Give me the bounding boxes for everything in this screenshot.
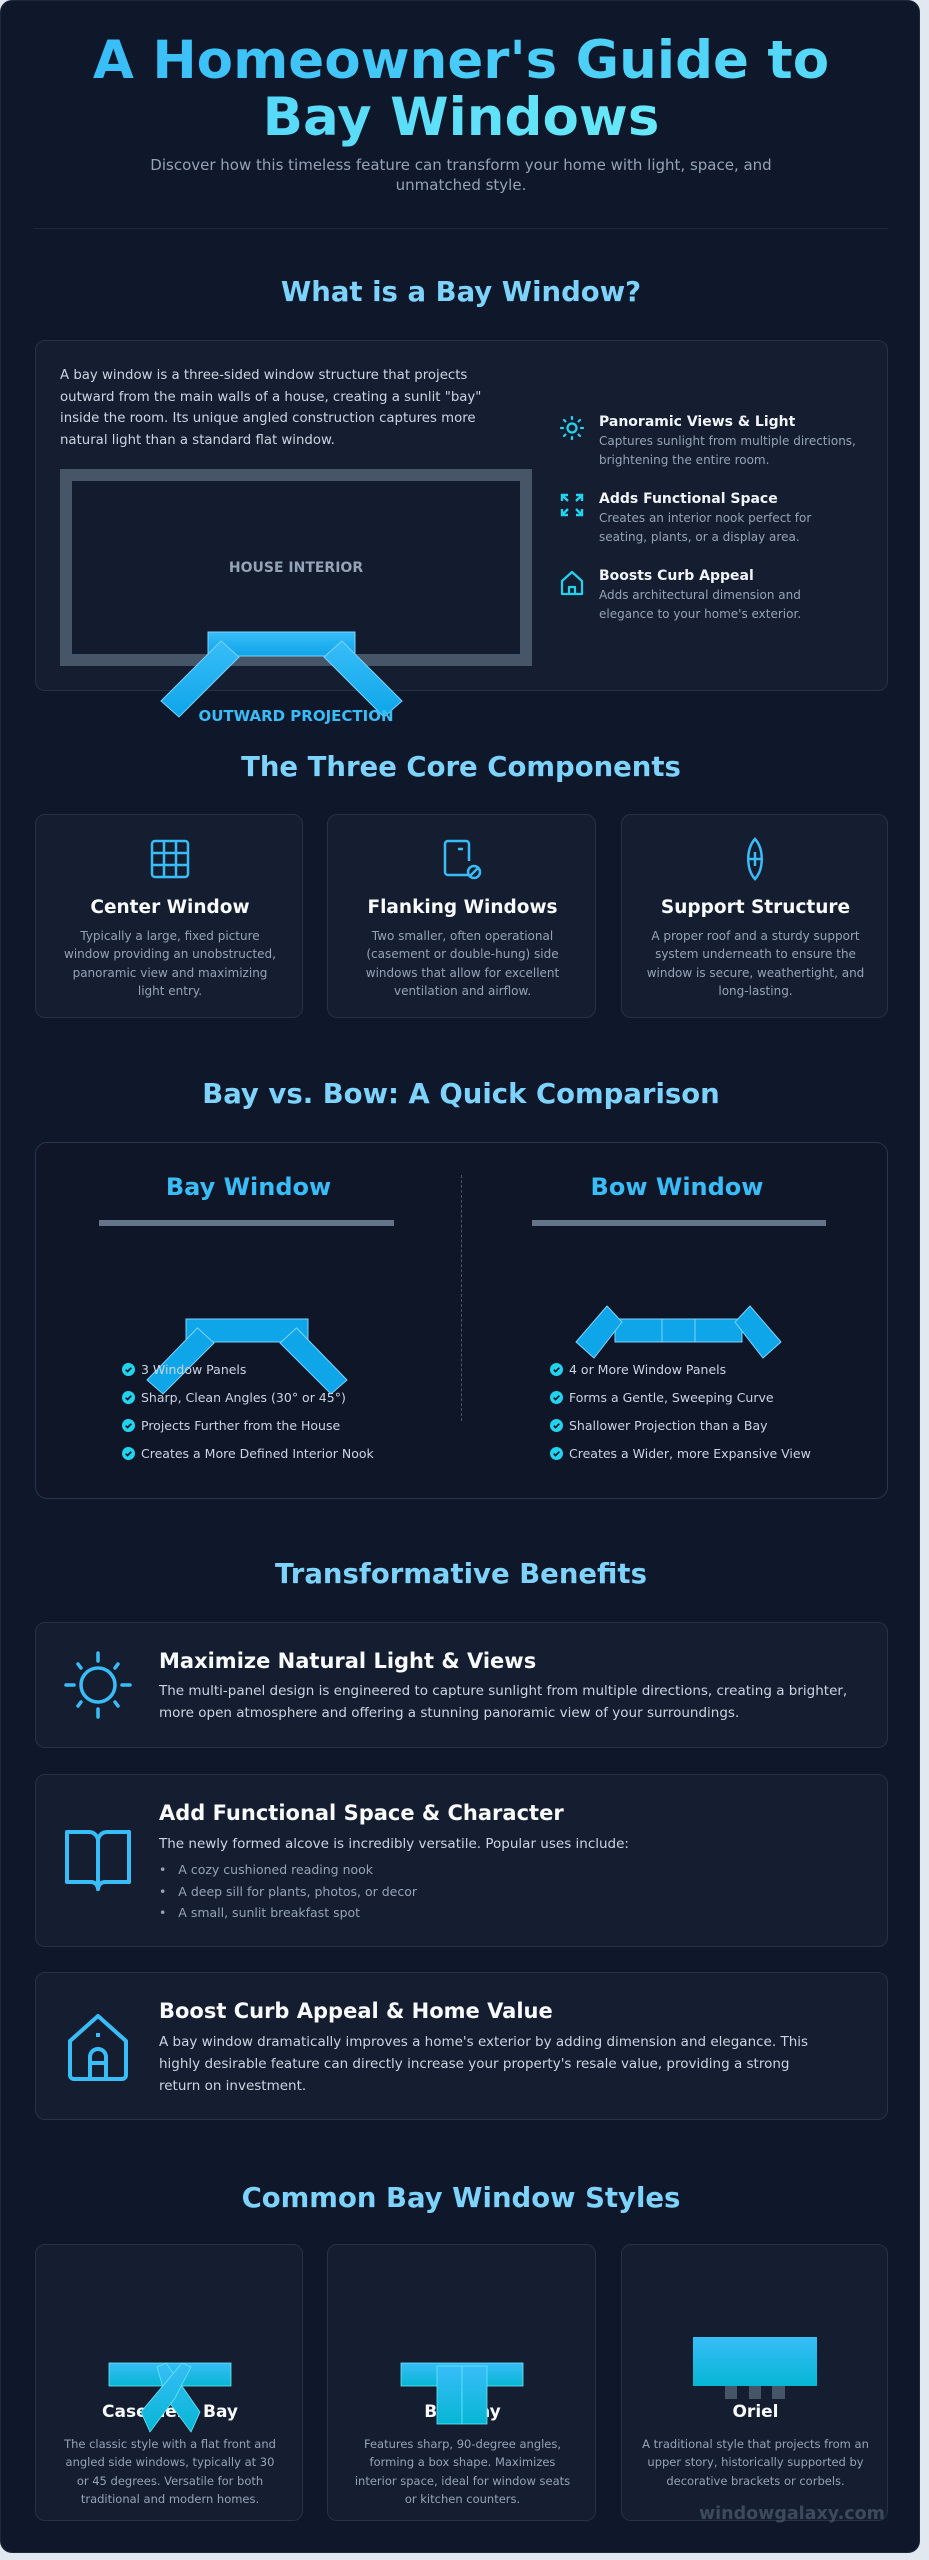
style card: casement bay: The classic style with a flat front and angled side windows, typically at 30 or 45 degrees. Versatile for both traditional and modern homes. [64, 2437, 276, 2506]
feature: panoramic views [560, 414, 856, 467]
feature: curb appeal [560, 568, 801, 621]
list: bay features: Projects Further from the House [141, 1418, 340, 1433]
benefit: functional space: The newly formed alcove is incredibly versatile. Popular uses include: [159, 1836, 629, 1852]
column: bay window: Bay Window [166, 1173, 331, 1201]
card: center window: Center Window [90, 897, 250, 918]
icon: sun [64, 1651, 132, 1719]
list: bow features: Forms a Gentle, Sweeping Curve [569, 1390, 774, 1405]
style card: casement bay [35, 2244, 303, 2521]
style card: casement bay: Casement Bay [102, 2402, 238, 2422]
label: house interior: HOUSE INTERIOR [229, 560, 363, 576]
style card: oriel: Oriel [732, 2402, 779, 2422]
column: bay window [99, 1173, 394, 1461]
panel: comparison [35, 1142, 888, 1499]
heading: bay vs bow: Bay vs. Bow: A Quick Comparison [202, 1078, 720, 1110]
card: flanking windows [327, 814, 596, 1018]
list: bay features: Creates a More Defined Interior Nook [141, 1446, 374, 1461]
list: bay features [122, 1362, 374, 1461]
feature: panoramic views: Captures sunlight from multiple directions, brightening the entire room. [599, 434, 856, 467]
icon: grid window [150, 840, 190, 878]
icon: box shape [400, 2362, 524, 2424]
title [93, 30, 829, 148]
icon: home value [68, 2014, 128, 2081]
benefit: curb appeal [35, 1972, 888, 2120]
style card: box bay: Features sharp, 90-degree angles, forming a box shape. Maximizes interior space, ideal for window seats or kitchen counters. [355, 2437, 570, 2506]
feature: panoramic views: Panoramic Views & Light [599, 414, 795, 430]
list: bow features: Creates a Wider, more Expansive View [569, 1446, 811, 1461]
column: bow window: Bow Window [591, 1173, 763, 1201]
heading: what is a bay window: What is a Bay Window? [281, 276, 641, 308]
benefit: curb appeal: Boost Curb Appeal & Home Value [159, 1999, 553, 2023]
icon: oriel shape [693, 2337, 817, 2399]
benefit: functional space: Add Functional Space & Character [159, 1801, 564, 1825]
card: flanking windows: Two smaller, often operational (casement or double-hung) side windows that allow for excellent ventilation and airflow. [366, 929, 559, 998]
card: center window: Typically a large, fixed picture window providing an unobstructed, panoramic view and maximizing light entry. [64, 929, 276, 998]
heading: common styles: Common Bay Window Styles [242, 2182, 680, 2214]
bay shape [146, 1318, 348, 1395]
bay window shape [161, 632, 402, 717]
watermark: windowgalaxy.com [699, 2504, 885, 2524]
style card: box bay [327, 2244, 596, 2521]
feature: functional space [560, 491, 812, 544]
feature: curb appeal: Adds architectural dimension and elegance to your home's exterior. [599, 588, 801, 621]
heading: three core components: The Three Core Components [241, 751, 681, 783]
title: Bay Windows [263, 87, 659, 148]
list: bow features [550, 1362, 811, 1461]
list: bow features: Shallower Projection than a Bay [569, 1418, 768, 1433]
style card: box bay: Box Bay [424, 2402, 501, 2422]
list: bay features: 3 Window Panels [141, 1362, 246, 1377]
list: uses [159, 1862, 417, 1920]
benefit: natural light: Maximize Natural Light & Views [159, 1649, 536, 1673]
card: center window [35, 814, 303, 1018]
icon: house [560, 570, 584, 596]
list: uses: • A small, sunlit breakfast spot [159, 1905, 360, 1920]
list: bay features: Sharp, Clean Angles (30° or 45°) [141, 1390, 346, 1405]
icon: sun [560, 416, 584, 440]
card: support structure [621, 814, 888, 1018]
heading: transformative benefits: Transformative Benefits [275, 1558, 647, 1590]
list: uses: • A deep sill for plants, photos, or decor [159, 1884, 417, 1898]
icon: support [747, 837, 763, 881]
card: support structure: Support Structure [661, 897, 850, 918]
definition text: A bay window is a three-sided window structure that projects outward from the main walls of a house, creating a sunlit "bay" inside the room. Its unique angled construction captures more natural light than a standard flat window. [60, 368, 481, 448]
benefit: functional space [35, 1774, 888, 1947]
list: bow features: 4 or More Window Panels [569, 1362, 726, 1377]
feature: curb appeal: Boosts Curb Appeal [599, 568, 754, 584]
benefit: natural light [35, 1622, 888, 1748]
diagram: house with bay window [60, 469, 532, 725]
panel: definition [35, 340, 888, 691]
benefit: natural light: The multi-panel design is engineered to capture sunlight from multiple directions, creating a brighter, more open atmosphere and offering a stunning panoramic view of your surroundings. [159, 1683, 847, 1721]
bow shape [575, 1305, 782, 1359]
icon: side window [444, 840, 482, 880]
icon: expand arrows [560, 494, 584, 516]
benefit: curb appeal: A bay window dramatically improves a home's exterior by adding dimension and elegance. This highly desirable feature can directly increase your property's resale value, providing a strong return on investment. [159, 2034, 808, 2094]
card: support structure: A proper roof and a sturdy support system underneath to ensure the window is secure, weathertight, and long-lasting. [647, 929, 864, 998]
feature: functional space: Adds Functional Space [599, 491, 778, 507]
style card: oriel [621, 2244, 888, 2521]
column: bow window [532, 1173, 826, 1461]
style card: oriel: A traditional style that projects from an upper story, historically supported by decorative brackets or corbels. [642, 2437, 869, 2488]
list: uses: • A cozy cushioned reading nook [159, 1862, 373, 1877]
title: A Homeowner's Guide to [93, 30, 829, 91]
feature: functional space: Creates an interior nook perfect for seating, plants, or a display area. [599, 511, 811, 544]
icon: casement shape [108, 2362, 232, 2433]
icon: book [65, 1830, 131, 1891]
label: outward projection: OUTWARD PROJECTION [198, 707, 394, 725]
card: flanking windows: Flanking Windows [367, 897, 558, 918]
subtitle: Discover how this timeless feature can transform your home with light, space, and unmatched style. [150, 156, 772, 194]
